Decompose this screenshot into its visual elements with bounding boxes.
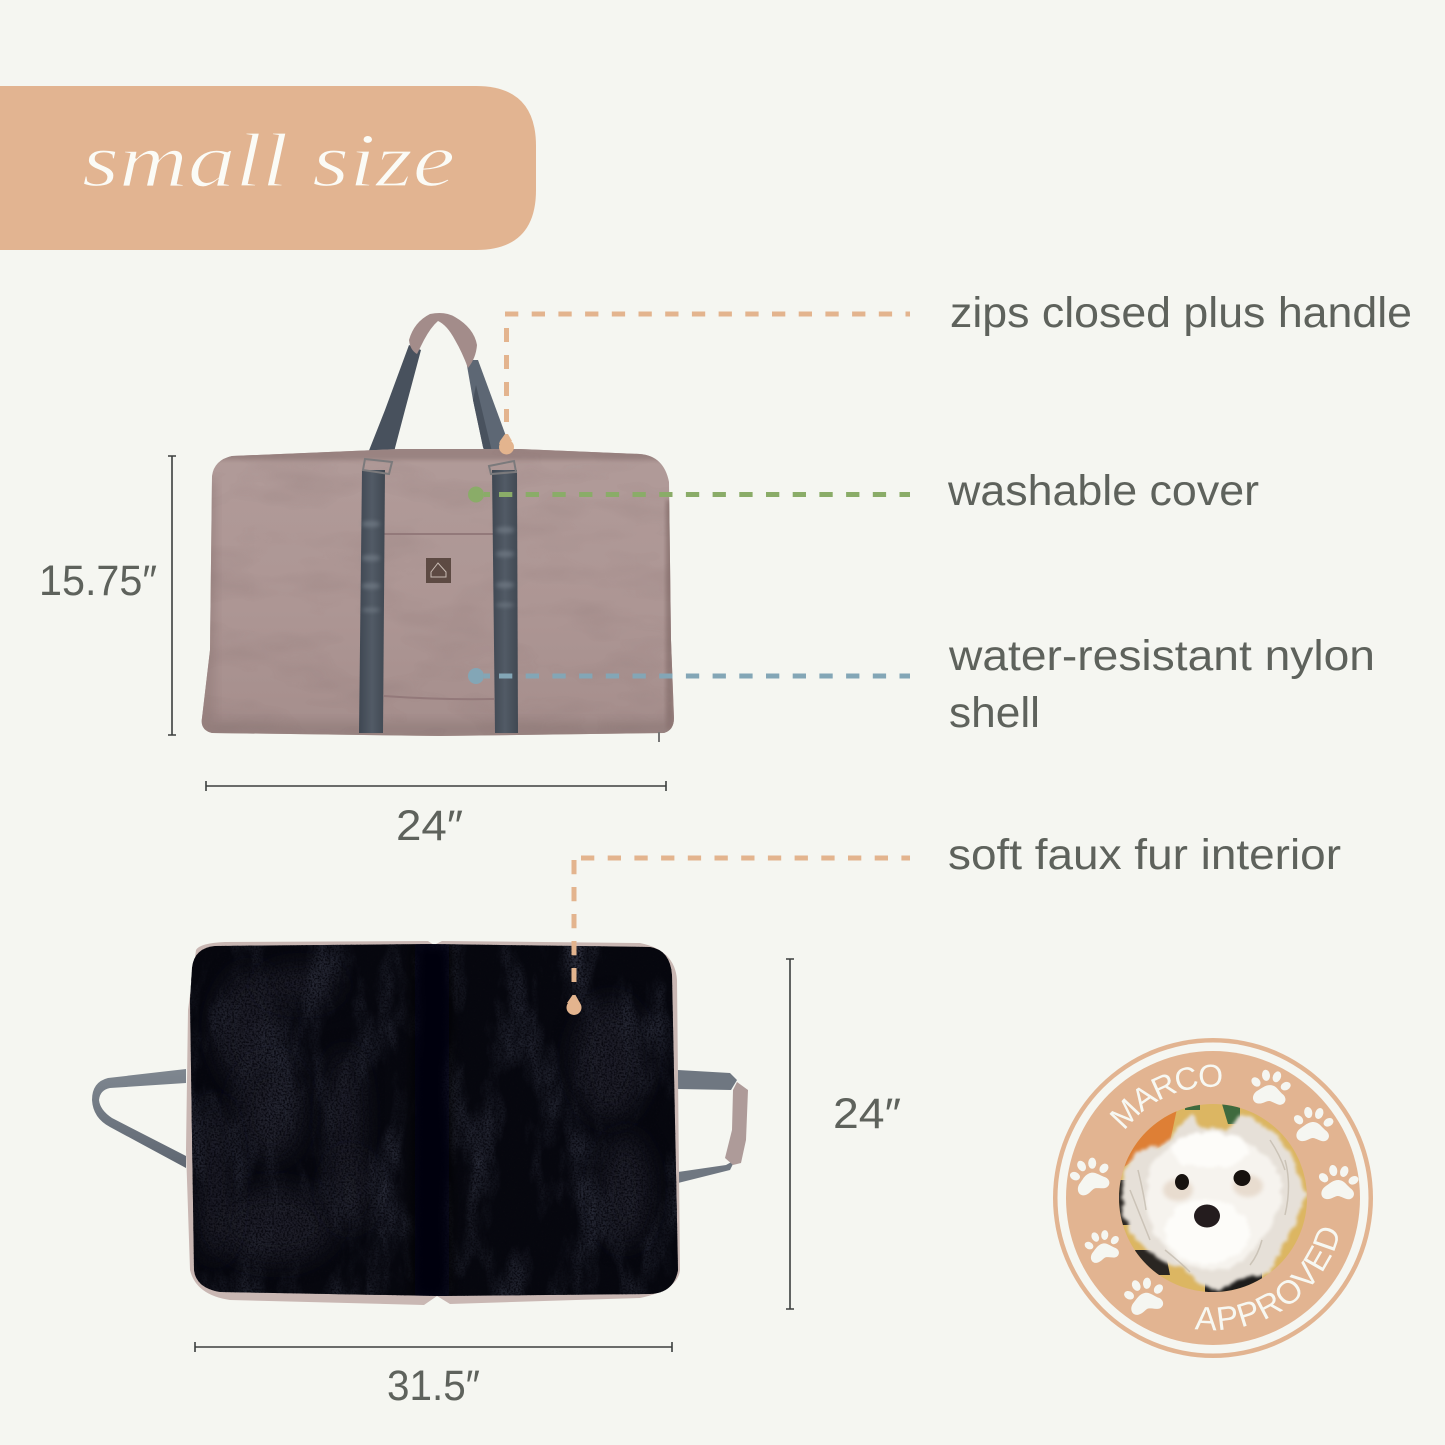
dog eyes [1175,1170,1250,1190]
right handle pad [725,1082,748,1165]
dimension: open height [786,959,901,1309]
dimension: open width [195,1342,672,1410]
left side strap [92,1069,186,1168]
heading banner: small size: small size [82,119,455,203]
dimension: open height: 24″ [833,1090,901,1138]
dog fur strands [1130,1140,1288,1272]
dog photo [1119,1104,1307,1295]
label: zips closed plus handle: zips closed plus handle [950,289,1412,337]
closed bag illustration [198,313,680,742]
right strap [489,461,518,733]
leader: water-resistant nylon shell [468,668,910,684]
faux fur interior [185,940,685,1300]
right side strap [678,1070,737,1183]
dog eye shading [1163,1175,1263,1201]
heading banner: small size [0,86,536,250]
label: soft faux fur interior: soft faux fur interior [948,831,1341,879]
leader: zips closed plus handle [499,314,910,454]
logo patch [426,558,451,583]
label: water-resistant nylon shell [948,632,1375,737]
dog nose [1194,1204,1220,1228]
left strap [359,459,392,733]
label: washable cover: washable cover [947,467,1259,515]
paw icons [1065,1067,1361,1317]
callout labels [947,289,1412,879]
dimension: open width: 31.5″ [387,1362,480,1410]
dimension: bag height [39,456,176,735]
label: water-resistant nylon shell: water-resistant nylon [948,632,1375,680]
badge: Marco approved [1053,1038,1373,1358]
label: water-resistant nylon shell: shell [949,689,1040,737]
bag handle straps [365,345,513,466]
bag handle pad [409,313,477,368]
dimension: bag width: 24″ [396,802,463,850]
nylon edge [186,941,680,1305]
open bag with side straps [92,940,748,1305]
leader: washable cover [468,486,910,502]
dimension: bag width [206,781,666,850]
badge text: MARCO: MARCO [1110,1064,1222,1129]
badge text: APPROVED: APPROVED [1194,1228,1338,1330]
leader: soft faux fur interior [566,858,910,1015]
zipper pull [658,732,660,742]
pocket seam lines [384,534,494,699]
bag body [202,449,674,736]
dimension: bag height: 15.75″ [39,557,157,605]
